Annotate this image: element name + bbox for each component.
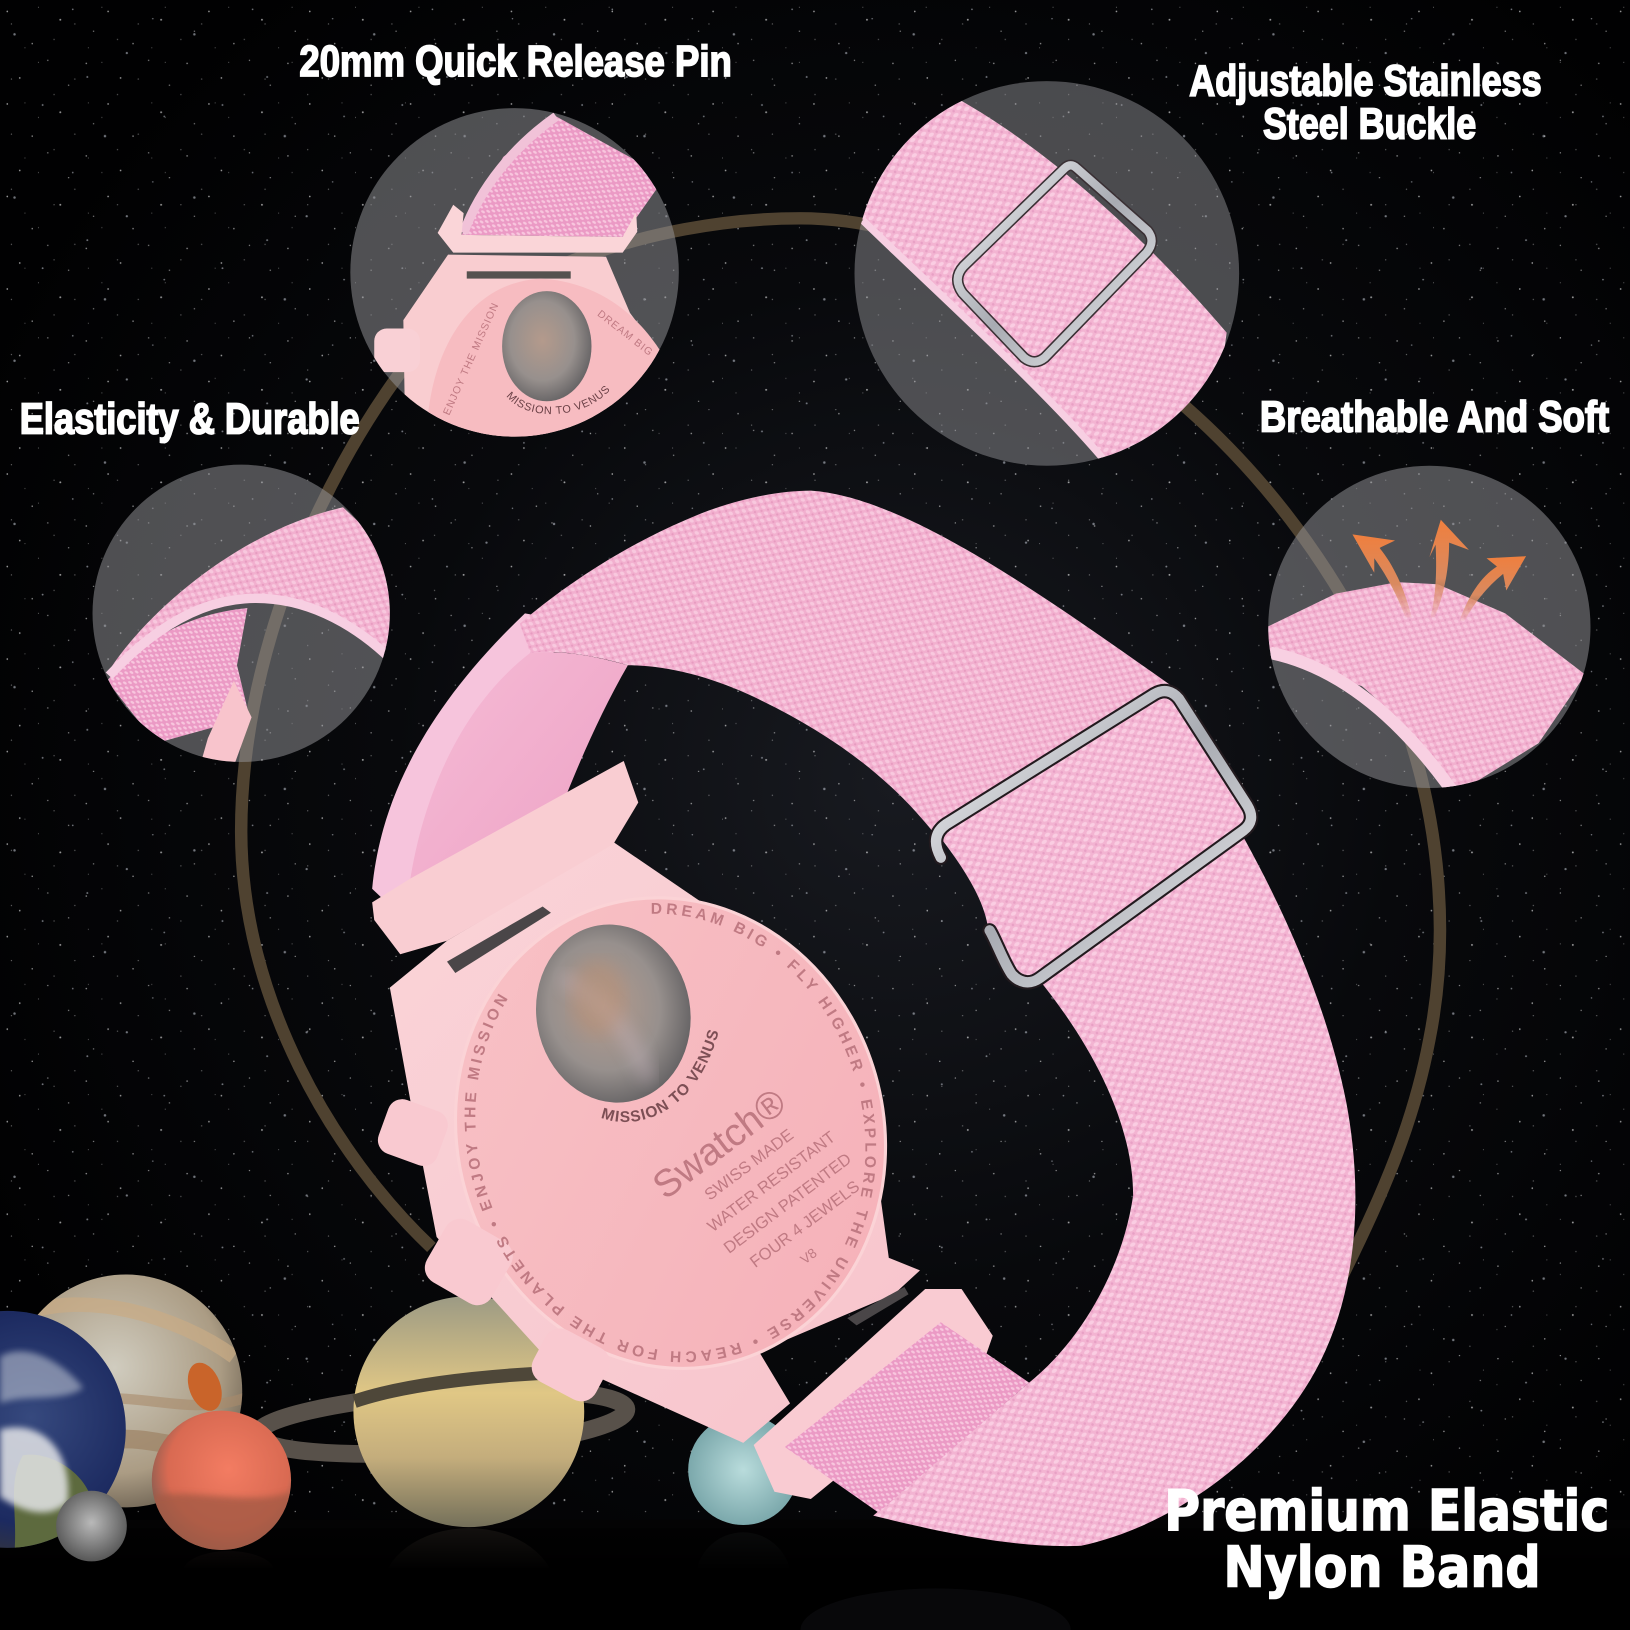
title: premium elastic nylon band bbox=[1164, 1479, 1609, 1600]
lug in detail bbox=[202, 681, 252, 762]
planet: Saturn bbox=[255, 1296, 628, 1527]
text: dream big: DREAM BIG bbox=[595, 309, 655, 359]
spring bar top bbox=[447, 906, 551, 973]
detail circle: buckle bbox=[852, 81, 1239, 489]
strap end piece bbox=[785, 1322, 1029, 1513]
lug in detail bbox=[438, 205, 637, 253]
back engraving: V8 bbox=[798, 1245, 820, 1267]
buckle shadow bbox=[936, 691, 1251, 982]
detail circle: breathable bbox=[1263, 466, 1590, 795]
title: premium elastic nylon band: Nylon Band bbox=[1224, 1535, 1541, 1600]
back engraving: FOUR 4 JEWELS bbox=[746, 1177, 863, 1271]
detail circle: quick release pin bbox=[350, 108, 679, 437]
gap in detail bbox=[467, 271, 571, 279]
back engraving: Swatch® bbox=[645, 1081, 794, 1208]
text in detail: MISSION TO VENUS bbox=[506, 386, 609, 414]
metal buckle bbox=[936, 691, 1251, 982]
back plate in detail bbox=[428, 278, 660, 437]
buckle in detail bbox=[958, 165, 1152, 362]
band outer rim bbox=[372, 613, 582, 925]
spring bar bottom bbox=[847, 1287, 909, 1325]
band in detail bbox=[862, 101, 1227, 458]
band edge bbox=[863, 220, 1102, 457]
band inner face bbox=[405, 652, 628, 925]
band upper section bbox=[520, 491, 1175, 842]
watch case bbox=[390, 842, 920, 1443]
heading: adjustable buckle: Steel Buckle bbox=[1263, 99, 1476, 148]
planet: Jupiter bbox=[38, 1274, 242, 1508]
band rim bbox=[109, 598, 395, 676]
detail circle: elasticity bbox=[93, 465, 400, 774]
planet: Mars bbox=[151, 1411, 291, 1554]
strap in detail bbox=[462, 116, 665, 237]
bottom lug bbox=[754, 1289, 993, 1499]
buckle shadow bbox=[958, 165, 1152, 362]
mission window planet bbox=[536, 924, 691, 1103]
ring engraving: DREAM BIG • FLY HIGHER • EXPLORE THE UNIVERSE • REACH FOR THE PLANETS • ENJOY THE MISSION bbox=[464, 903, 876, 1362]
heading: adjustable buckle bbox=[1189, 57, 1542, 148]
watch bbox=[372, 761, 1029, 1512]
planet: Earth bbox=[0, 1311, 126, 1570]
main elastic band bbox=[372, 491, 1355, 1546]
heading: elasticity: Elasticity & Durable bbox=[20, 394, 360, 443]
orbit ring bbox=[241, 218, 1440, 1279]
top lug bbox=[372, 761, 638, 954]
back engraving: SWISS MADE bbox=[701, 1125, 797, 1204]
dark reflective floor bbox=[0, 1520, 1630, 1630]
band lower section bbox=[873, 790, 1355, 1546]
planet window bbox=[502, 291, 591, 401]
planet: Moon bbox=[56, 1491, 127, 1561]
band under buckle bbox=[936, 691, 1251, 982]
strap edge bbox=[464, 116, 556, 233]
band edge in detail bbox=[1270, 653, 1455, 795]
case in detail bbox=[403, 254, 658, 437]
back engraving: DESIGN PATENTED bbox=[720, 1149, 855, 1257]
band inner in detail bbox=[107, 608, 249, 743]
heading: quick release pin: 20mm Quick Release Pin bbox=[299, 37, 732, 86]
band outer in detail bbox=[109, 507, 400, 671]
planets bbox=[0, 1274, 798, 1570]
back engraving: WATER RESISTANT bbox=[704, 1127, 839, 1236]
band in detail bbox=[1263, 582, 1585, 790]
case back bbox=[400, 847, 941, 1420]
mission text: MISSION TO VENUS bbox=[602, 1030, 718, 1122]
planet: Uranus bbox=[688, 1415, 798, 1525]
text: enjoy the mission: ENJOY THE MISSION bbox=[442, 301, 502, 417]
back engraving bbox=[645, 1069, 887, 1311]
crowns bbox=[374, 1095, 616, 1407]
airflow arrows bbox=[1352, 520, 1526, 621]
heading: adjustable buckle: Adjustable Stainless bbox=[1189, 57, 1542, 106]
crown in detail bbox=[374, 328, 404, 372]
